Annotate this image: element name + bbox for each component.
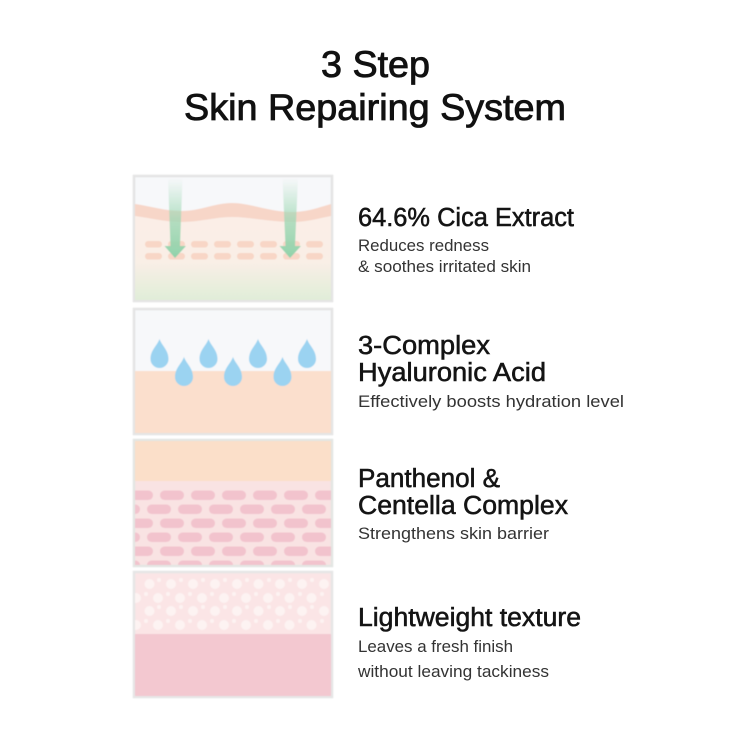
text block: lightweight texture: Lightweight texture	[358, 604, 581, 632]
text block: cica extract: Reduces redness	[358, 236, 489, 255]
title	[184, 44, 566, 128]
skin cell dashes	[145, 241, 323, 260]
title: 3 Step	[321, 44, 430, 85]
texture bubbles	[131, 578, 329, 630]
arrow: left	[164, 178, 186, 258]
title: Skin Repairing System	[184, 87, 566, 128]
panel: panthenol and centella illustration	[132, 438, 334, 568]
text block: lightweight texture: Leaves a fresh finish	[358, 637, 513, 656]
barrier bricks	[134, 490, 332, 566]
text block: panthenol and centella	[358, 465, 568, 543]
text block: lightweight texture	[357, 604, 581, 681]
text block: cica extract	[358, 204, 574, 276]
text block: lightweight texture: without leaving tackiness	[357, 662, 549, 681]
water drops	[150, 339, 316, 386]
panel: lightweight texture illustration	[131, 572, 332, 697]
text block: panthenol and centella: Strengthens skin barrier	[358, 524, 549, 543]
panel: hyaluronic acid illustration	[134, 309, 332, 434]
text block: panthenol and centella: Panthenol &	[358, 465, 500, 493]
text block: hyaluronic acid: 3-Complex	[358, 332, 490, 360]
text block: cica extract: 64.6% Cica Extract	[358, 204, 574, 232]
text block: hyaluronic acid: Hyaluronic Acid	[358, 359, 546, 387]
arrow: right	[280, 178, 301, 258]
text block: hyaluronic acid: Effectively boosts hydration level	[358, 392, 624, 411]
text block: panthenol and centella: Centella Complex	[358, 492, 568, 520]
panel: cica extract illustration	[134, 176, 332, 301]
text block: cica extract: & soothes irritated skin	[358, 257, 531, 276]
text block: hyaluronic acid	[358, 332, 624, 411]
